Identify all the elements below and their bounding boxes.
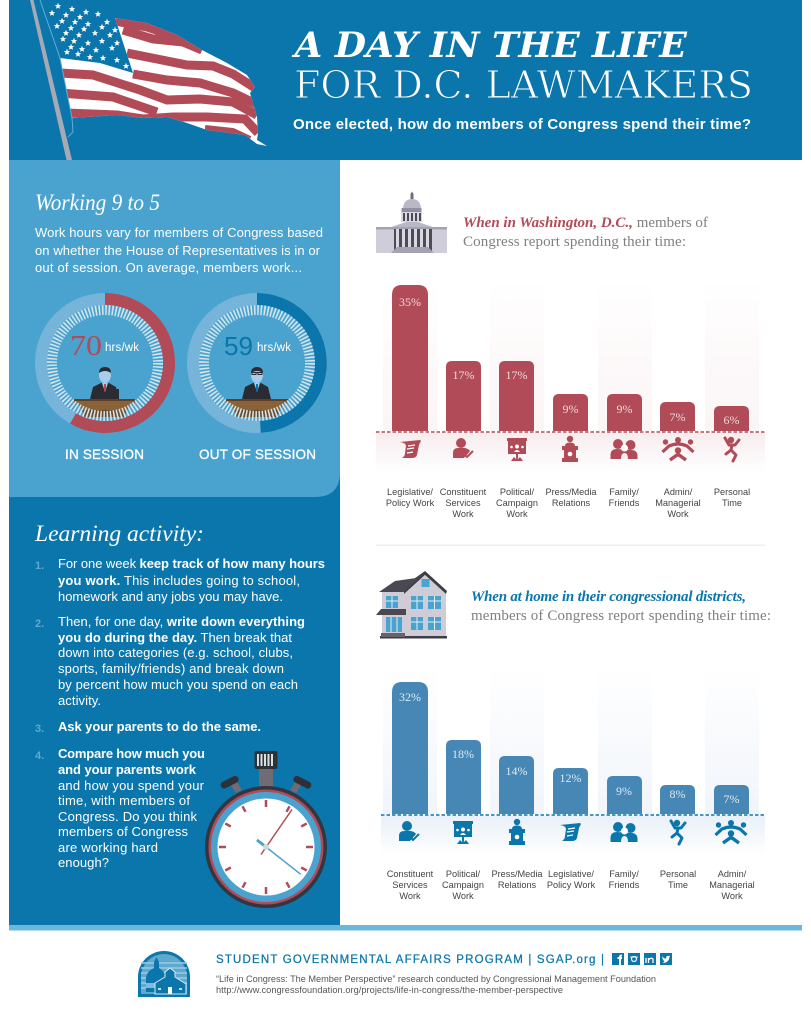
bar: legislative 35% [392,285,428,431]
text block: intro [35,225,323,275]
chart: out of session donut [193,299,321,427]
footer [9,925,802,997]
title [289,25,753,108]
list item 2: activity. [58,693,101,708]
text: home district heading: When at home in their congressional districts, [471,589,746,605]
bar: legislative 12% [553,768,588,814]
labels: home categories: Admin/ [718,869,747,879]
value: 70 hrs/wk: 70 [70,330,102,362]
icon: family [610,439,638,459]
icon: legislative [560,823,581,841]
list item 2: Then, for one day, write down everything [58,614,305,629]
list item 2: by percent how much you spend on each [58,677,298,692]
labels: Washington categories: Time [722,498,742,508]
text: citation [216,974,656,995]
labels: home categories: Relations [498,880,537,890]
labels: home categories: Campaign [442,880,484,890]
icon: American flag [40,0,267,146]
icon: press [509,819,525,845]
bar: press 14%: 14% [506,764,528,778]
icon: press [562,436,578,462]
bar: political 18%: 18% [452,747,474,761]
list item 2: down into categories (e.g. school, clubs, [58,645,293,660]
labels: Washington categories: Services [445,498,481,508]
bar: family 9% [607,394,642,431]
icon: stopwatch [205,751,327,908]
text: home district heading: members of Congress report spending their time: [471,608,771,624]
bar: personal 8%: 8% [670,787,686,801]
chart: time at home [381,665,765,901]
icon: personal [671,820,685,844]
list item 1: 1. [35,560,44,572]
text block: intro: out of session. On average, members work... [35,260,302,275]
label: out of session: OUT OF SESSION [199,447,316,462]
icon: lawmaker with glasses at desk [226,367,288,417]
labels: Washington categories: Work [667,509,689,519]
icon: constituent [453,438,473,458]
labels: Washington categories: Managerial [655,498,701,508]
labels: home categories: Personal [660,869,696,879]
text: Washington heading [463,215,708,250]
icon: family [610,822,638,842]
labels: Washington categories [386,487,750,519]
text: citation: “Life in Congress: The Member Perspective” research conducted by Congressional Management Foundation [216,974,656,984]
section: Washington heading [376,192,708,253]
text: citation: http://www.congressfoundation.org/projects/life-in-congress/the-member-perspective [216,985,563,995]
list item 4: 4. [35,750,44,762]
labels: home categories: Work [399,891,421,901]
list item 4: Congress. Do you think [58,809,198,824]
bar: press 14% [499,756,534,814]
list item 4: time, with members of [58,793,190,808]
list item 2 [35,614,305,708]
icon: house [376,571,447,638]
bar: admin 7%: 7% [670,410,686,424]
labels: Washington categories: Policy Work [386,498,435,508]
value: 70 hrs/wk [70,330,139,362]
labels: Washington categories: Campaign [496,498,538,508]
text: home district heading [471,589,771,624]
panel: working 9 to 5 [9,160,340,497]
bar: family 9%: 9% [616,402,632,416]
value: 70 hrs/wk: hrs/wk [105,342,139,354]
chart: in session donut [41,299,169,427]
header banner [9,0,802,160]
icon: lawmaker at desk [74,367,135,417]
bar: admin 7%: 7% [724,792,740,806]
labels: Washington categories: Family/ [609,487,639,497]
labels: Washington categories: Relations [552,498,591,508]
heading: working 9 to 5: Working 9 to 5 [35,190,160,215]
icon: personal [725,437,739,461]
labels: home categories: Work [721,891,743,901]
icon: admin [662,437,694,460]
bar: constituent 32%: 32% [399,690,421,704]
heading: learning activity: Learning activity: [34,521,204,546]
bar: legislative 35%: 35% [399,295,421,309]
list item 1: you work. This includes going to school, [58,573,300,588]
subtitle: Once elected, how do members of Congress spend their time? [293,116,751,133]
list item 1: homework and any jobs you may have. [58,589,283,604]
icon: admin [716,820,746,843]
bar: press 9% [553,394,588,431]
bar: admin 7% [660,402,695,431]
text block: intro: Work hours vary for members of Congress based [35,225,323,240]
labels: home categories: Political/ [446,869,481,879]
list item 1: For one week keep track of how many hours [58,556,325,571]
bar: personal 6% [714,406,749,431]
label: in session: IN SESSION [65,447,144,462]
list item 2: sports, family/friends) and break down [58,661,284,676]
labels: Washington categories: Political/ [500,487,535,497]
icon: capitol building [376,192,447,253]
icon: flag pole [30,0,72,160]
icon: legislative [400,440,421,458]
bar: political 17% [499,361,534,431]
icon: political [453,821,473,844]
labels: Washington categories: Admin/ [664,487,693,497]
text: Washington heading: When in Washington, D.C., members of [463,215,708,231]
icon: SGAP logo [138,951,190,997]
chart: time in Washington [376,280,765,519]
labels: Washington categories: Press/Media [545,487,597,497]
labels: home categories: Policy Work [547,880,596,890]
title: A DAY IN THE LIFE [289,25,691,66]
labels: home categories: Legislative/ [548,869,594,879]
labels: home categories: Work [452,891,474,901]
list item 4: and how you spend your [58,778,205,793]
list item 4: are working hard [58,840,158,855]
list item 2: you do during the day. Then break that [58,630,292,645]
list item 4: members of Congress [58,824,188,839]
bar: legislative 12%: 12% [560,771,582,785]
value: 59 hrs/wk [224,331,291,361]
bar: constituent 32% [392,682,428,814]
bar: admin 7% [714,785,749,814]
bar: constituent 17% [446,361,481,431]
list item 1 [35,556,325,604]
value: 59 hrs/wk: hrs/wk [257,342,291,354]
bar: political 18% [446,740,481,814]
labels: home categories: Time [668,880,688,890]
bar: family 9% [607,776,642,814]
bar: press 9%: 9% [562,402,578,416]
list item 2: 2. [35,618,44,630]
list item 4: Compare how much you [58,746,205,761]
icon: constituent [399,821,419,841]
labels: Washington categories: Personal [714,487,750,497]
labels: home categories: Press/Media [491,869,543,879]
panel: learning activity background [9,460,340,925]
bar: personal 6%: 6% [724,413,740,427]
list item 3: 3. [35,723,44,735]
labels: home categories: Services [392,880,428,890]
list item 4: and your parents work [58,762,197,777]
section: home district heading [376,571,771,638]
icons: social media [612,953,672,965]
bar: family 9%: 9% [616,784,632,798]
bar: constituent 17%: 17% [452,368,474,382]
labels: Washington categories: Legislative/ [387,487,433,497]
labels: home categories [387,869,755,901]
text block: intro: on whether the House of Representatives is in or [35,243,321,258]
list item 3: Ask your parents to do the same. [58,719,261,734]
labels: Washington categories: Work [452,509,474,519]
icon: political [507,438,527,461]
text: program line: STUDENT GOVERNMENTAL AFFAIRS PROGRAM | SGAP.org | [216,954,604,966]
title: FOR D.C. LAWMAKERS [294,63,753,108]
list item 4: enough? [58,855,109,870]
labels: home categories: Friends [609,880,640,890]
bar: political 17%: 17% [506,368,528,382]
labels: home categories: Constituent [387,869,434,879]
labels: home categories: Managerial [709,880,755,890]
list item 4 [35,746,205,870]
labels: home categories: Family/ [609,869,639,879]
value: 59 hrs/wk: 59 [224,331,253,361]
labels: Washington categories: Constituent [440,487,487,497]
labels: Washington categories: Friends [609,498,640,508]
panel: learning activity [34,521,327,908]
text: Washington heading: Congress report spending their time: [463,234,686,250]
bar: personal 8% [660,785,695,814]
labels: Washington categories: Work [506,509,528,519]
